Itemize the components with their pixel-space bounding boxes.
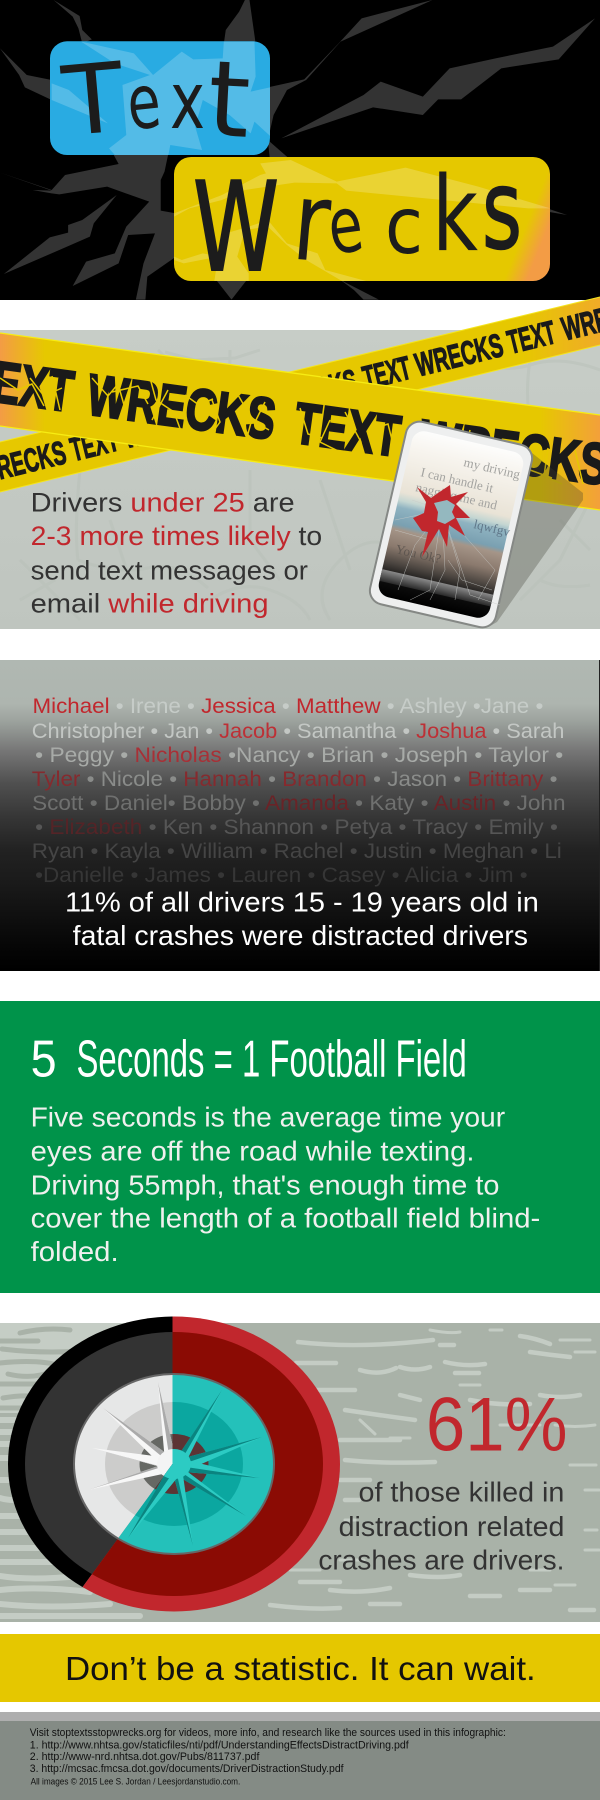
list of names: •Danielle • James • Lauren • Casey • Alicia • Jim •	[35, 864, 528, 887]
source list	[30, 1727, 506, 1786]
slogan: Don’t be a statistic. It can wait.	[65, 1650, 536, 1687]
source list: 3. http://mcsac.fmcsa.dot.gov/documents/DriverDistractionStudy.pdf	[30, 1763, 344, 1775]
donut chart 61 percent	[8, 1316, 340, 1612]
title: Wrecks: W	[193, 157, 279, 300]
caption: of those killed in	[358, 1477, 564, 1508]
statistic text	[31, 488, 322, 619]
list of names: Michael • Irene • Jessica • Matthew • Ashley •Jane •	[32, 695, 543, 718]
icon: cracked phone: nagging me and	[414, 479, 499, 513]
panel: drivers killed	[0, 1316, 600, 1622]
caution tape: back: WRECKS	[411, 326, 507, 383]
caution tape: back: WRECKS	[266, 362, 361, 419]
source list: Visit stoptextsstopwrecks.org for videos, more info, and research like the sources used in this infographic:	[30, 1727, 506, 1739]
body text: folded.	[31, 1236, 119, 1267]
list of names: • Peggy • Nicholas •Nancy • Brian • Joseph • Taylor •	[35, 744, 563, 767]
panel: under 25 statistic	[0, 290, 600, 630]
body text	[31, 1102, 540, 1267]
caution tape: back: TEXT	[67, 421, 122, 468]
list of names: Scott • Daniel• Bobby • Amanda • Katy • Austin • John	[32, 792, 566, 815]
panel: call to action	[0, 1634, 600, 1702]
title: Wrecks: r	[288, 157, 336, 287]
title: Text: x	[170, 57, 205, 147]
statistic text: 11% of all drivers 15 - 19 years old in	[65, 887, 539, 918]
icon: cracked phone: lqwfgv	[472, 516, 512, 539]
source list: 1. http://www.nhtsa.gov/staticfiles/nti/pdf/UnderstandingEffectsDistractDriving.pdf	[30, 1739, 410, 1751]
shattered glass cracks	[0, 0, 595, 300]
caption: crashes are drivers.	[318, 1544, 564, 1575]
list of names: Tyler • Nicole • Hannah • Brandon • Jason • Brittany •	[32, 768, 558, 791]
title: Wrecks: s	[482, 146, 522, 274]
statistic text: send text messages or	[31, 555, 308, 585]
source list: 2. http://www-nrd.nhtsa.dot.gov/Pubs/811737.pdf	[30, 1751, 260, 1763]
caption	[318, 1477, 564, 1575]
panel: header	[0, 0, 600, 300]
title: Text: t	[205, 38, 253, 162]
list of names: • Elizabeth • Ken • Shannon • Petya • Tracy • Emily •	[35, 816, 558, 839]
title: Text: e	[123, 57, 165, 148]
caution tape: front: TEXT	[290, 391, 404, 470]
title: Wrecks: k	[432, 155, 478, 275]
panel: sources footer	[0, 1712, 600, 1800]
caution tape: back: TEXT	[359, 349, 414, 396]
list of names: Christopher • Jan • Jacob • Samantha • Joshua • Sarah	[32, 720, 564, 743]
title: Wrecks: c	[385, 182, 423, 272]
phone shadow	[488, 453, 583, 627]
list of names: Ryan • Kayla • William • Rachel • Justin • Meghan • Li	[32, 840, 562, 863]
panel: football field	[0, 1001, 600, 1293]
caution tape: front	[0, 333, 600, 510]
caution tape: back: TEXT	[504, 313, 559, 361]
source list: All images © 2015 Lee S. Jordan / Leesjordanstudio.com.	[31, 1776, 240, 1786]
caution tape: back	[0, 290, 600, 492]
statistic text	[65, 887, 539, 951]
percentage: 61%	[426, 1383, 568, 1468]
caution tape: back: TEXT	[213, 385, 269, 432]
body text: eyes are off the road while texting.	[31, 1136, 474, 1167]
icon: cracked phone	[367, 419, 535, 630]
title: Text: T	[57, 41, 128, 158]
body text: cover the length of a football field blind-	[31, 1203, 540, 1234]
statistic text: fatal crashes were distracted drivers	[73, 920, 528, 951]
statistic text: Drivers under 25 are	[31, 488, 295, 518]
caption: distraction related	[339, 1511, 564, 1542]
heading: 5	[31, 1031, 57, 1089]
body text: Driving 55mph, that's enough time to	[31, 1169, 499, 1200]
title: Wrecks	[193, 146, 522, 300]
statistic text: email while driving	[31, 589, 269, 619]
statistic text: 2-3 more times likely to	[31, 521, 322, 551]
body text: Five seconds is the average time your	[31, 1102, 505, 1133]
title: Text	[57, 38, 253, 162]
heading	[31, 1031, 467, 1089]
icon: cracked phone: I can handle it	[419, 464, 495, 496]
list of names	[32, 695, 566, 887]
logo box: Text	[50, 41, 270, 155]
glass reflection on logo boxes	[52, 42, 550, 281]
icon: cracked phone: my driving	[462, 454, 522, 482]
title: Wrecks: e	[322, 180, 368, 273]
logo box: Wrecks	[174, 157, 550, 281]
caution tape: back: WRECKS	[119, 398, 214, 455]
caution tape: front: WRECKS	[83, 362, 279, 452]
panel: names statistic	[0, 660, 600, 971]
icon: cracked phone: You Ok?	[394, 541, 443, 566]
